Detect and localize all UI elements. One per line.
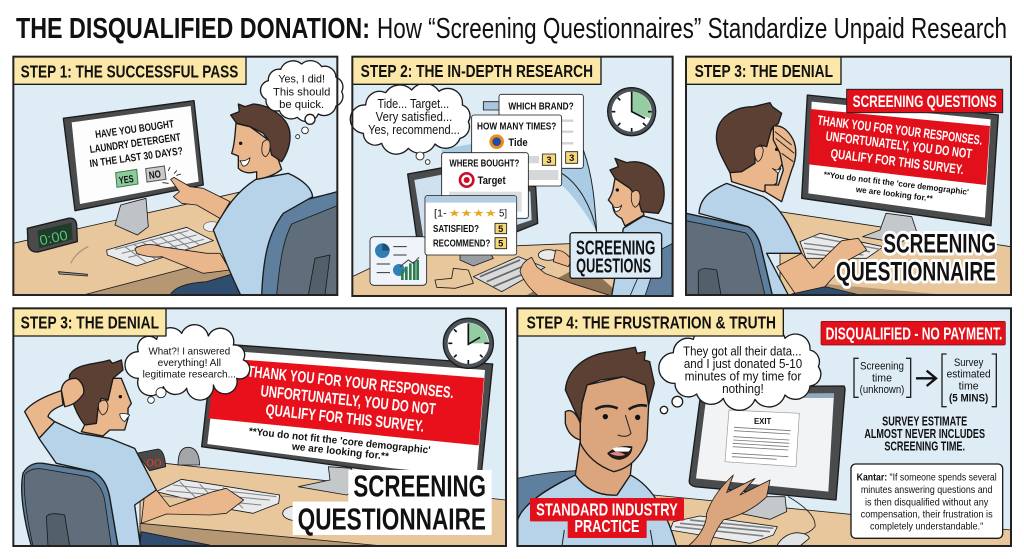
label: screening questions: QUESTIONS — [576, 254, 651, 277]
quote box: kantar: completely understandable." — [870, 522, 984, 533]
flow: screening time to survey estimate: Screening — [860, 361, 904, 373]
denial message — [246, 364, 454, 463]
document: exit: EXIT — [754, 416, 771, 426]
step label: STEP 1: THE SUCCESSFUL PASS — [21, 61, 238, 81]
monitor — [689, 386, 845, 500]
person and props — [22, 360, 280, 546]
card: how many times: Tide — [508, 137, 528, 149]
keyboard — [156, 479, 280, 513]
flow: screening time to survey estimate — [854, 354, 996, 407]
step label — [352, 57, 601, 84]
raised arm — [25, 391, 63, 438]
monitor — [408, 167, 538, 266]
screen question: LAUNDRY DETERGENT — [89, 131, 182, 156]
label: screening questions — [570, 233, 662, 278]
mousepad shape — [435, 268, 473, 288]
chair — [518, 471, 575, 520]
quote box: kantar: is then disqualified without any — [865, 497, 989, 508]
card: rating — [425, 196, 517, 255]
quote box: kantar — [851, 464, 1003, 538]
icon: tide logo — [489, 134, 504, 149]
icon: digital clock — [27, 218, 77, 252]
quote box: kantar: compensation, their frustration is — [861, 509, 993, 520]
card: which brand: WHICH BRAND? — [508, 101, 574, 112]
flow: screening time to survey estimate: Survey — [954, 357, 984, 369]
icon: digital clock and speaker: :00 — [142, 458, 162, 470]
step label — [517, 308, 783, 336]
step label — [13, 57, 246, 84]
panel: step 2 the in-depth research — [350, 57, 673, 296]
panel: step 3 the denial — [686, 57, 1011, 295]
monitor — [802, 95, 998, 226]
note: survey estimate: SCREENING TIME. — [884, 439, 965, 453]
thought bubble: What?! I answered — [148, 346, 230, 357]
thought bubble: and I just donated 5-10 — [684, 356, 802, 371]
person — [135, 104, 313, 295]
card: rating: SATISFIED? — [433, 224, 479, 235]
card: how many times — [472, 115, 562, 186]
head — [608, 158, 664, 226]
thought bubble: Yes, I did! — [278, 74, 325, 86]
denial message — [817, 113, 983, 203]
button no: NO — [148, 169, 162, 182]
keyboard — [800, 233, 883, 258]
label: screening questions: SCREENING — [576, 236, 655, 259]
thought bubble: Tide... Target... — [377, 97, 449, 111]
screen question: HAVE YOU BOUGHT — [94, 118, 175, 141]
denial message: UNFORTUNATELY, YOU DO NOT — [260, 383, 437, 419]
arrow — [916, 371, 936, 386]
note: survey estimate — [864, 414, 985, 453]
monitor — [202, 343, 493, 487]
denial message: THANK YOU FOR YOUR RESPONSES. — [246, 364, 454, 402]
monitor stand — [740, 497, 787, 519]
thought bubble: Yes, recommend... — [368, 123, 460, 137]
chair — [22, 463, 118, 546]
panel: step 3 the denial wide — [13, 308, 506, 546]
flow: screening time to survey estimate: (unknown) — [860, 384, 905, 396]
icon: pen — [58, 272, 87, 276]
denial message: **You do not fit the 'core demographic' — [248, 426, 431, 457]
denial message: we are looking for.** — [854, 184, 934, 203]
card: where bought: WHERE BOUGHT? — [449, 159, 519, 170]
button yes: YES — [118, 174, 134, 187]
label: screening questionnaire — [293, 470, 492, 536]
denial message: QUALIFY FOR THIS SURVEY. — [830, 146, 965, 177]
monitor stand — [115, 198, 148, 235]
quote box: kantar: minutes answering questions and — [861, 485, 993, 496]
icon: digital clock: 0:00 — [38, 227, 69, 248]
card: rating: [1- — [434, 209, 447, 220]
step label: STEP 3: THE DENIAL — [21, 313, 159, 333]
label: screening questionnaire — [836, 228, 996, 287]
head — [81, 378, 131, 436]
quote box: kantar: Kantar: "If someone spends several — [857, 473, 997, 484]
thought bubble: be quick. — [279, 99, 324, 111]
thought bubble — [125, 325, 250, 403]
denial message: we are looking for.** — [290, 442, 390, 463]
thought bubble: nothing! — [722, 381, 764, 396]
keyboard — [107, 227, 213, 266]
thought bubble: They got all their data... — [683, 343, 801, 358]
document: exit — [725, 410, 799, 467]
person and chair — [686, 103, 867, 295]
red label: standard industry practice — [531, 499, 683, 537]
denial message: **You do not fit the 'core demographic' — [823, 169, 969, 197]
step label: STEP 2: THE IN-DEPTH RESEARCH — [361, 61, 593, 81]
keyboard — [473, 257, 545, 292]
card: which brand — [483, 94, 583, 168]
panel: step 4 the frustration and truth — [517, 308, 1011, 546]
thought bubble — [261, 61, 343, 139]
trousers — [140, 532, 210, 546]
step label: STEP 3: THE DENIAL — [695, 61, 833, 81]
chart card — [370, 237, 427, 285]
red label: standard industry practice: PRACTICE — [574, 516, 639, 536]
flow: screening time to survey estimate: time — [872, 372, 892, 384]
swoosh — [442, 140, 597, 232]
person — [518, 347, 676, 546]
note: survey estimate: SURVEY ESTIMATE — [882, 414, 967, 428]
chair — [258, 192, 337, 295]
keyboard — [670, 516, 777, 543]
card: rating: 5] — [499, 209, 507, 220]
chair — [686, 213, 772, 295]
card: rating: 5 — [498, 224, 503, 234]
head — [231, 104, 290, 179]
flow: screening time to survey estimate: estimated — [947, 369, 991, 381]
denial message: QUALIFY FOR THIS SURVEY. — [265, 402, 425, 436]
person — [520, 158, 673, 296]
step label: STEP 4: THE FRUSTRATION & TRUTH — [527, 313, 776, 333]
thought bubble — [350, 84, 470, 164]
monitor stand — [863, 213, 917, 243]
step label — [686, 57, 841, 84]
card: where bought — [442, 153, 528, 218]
icon: digital clock and speaker — [136, 447, 200, 471]
card: rating: RECOMMEND? — [433, 239, 490, 250]
flow: screening time to survey estimate: time — [959, 380, 979, 392]
red label: standard industry practice: STANDARD INDUSTRY — [536, 499, 678, 519]
monitor — [63, 101, 203, 211]
card: rating: 5 — [498, 239, 503, 249]
thought bubble — [659, 322, 821, 414]
mouse — [777, 533, 809, 546]
shirt — [39, 422, 156, 546]
label: screening questionnaire: SCREENING — [353, 470, 486, 504]
icon: wall clock — [443, 318, 493, 368]
thought bubble: legitimate research... — [143, 369, 236, 380]
panel: step 1 the successful pass — [13, 57, 343, 295]
thought bubble: Very satisfied... — [376, 110, 452, 124]
forearm — [141, 488, 244, 523]
card: where bought: Target — [478, 175, 506, 187]
step label — [13, 308, 166, 336]
card: how many times: HOW MANY TIMES? — [477, 121, 556, 132]
label: screening questionnaire: QUESTIONNAIRE — [298, 502, 486, 536]
screen question: IN THE LAST 30 DAYS? — [89, 145, 184, 170]
thought bubble: minutes of my time for — [685, 368, 802, 383]
card: how many times: 3 — [546, 155, 552, 165]
screen question — [89, 118, 184, 170]
flow: screening time to survey estimate: (5 MINS) — [949, 392, 989, 404]
gesturing hand — [688, 475, 770, 546]
card: which brand: 3 — [569, 153, 574, 163]
card: rating: ★★★★ — [448, 209, 497, 220]
thought bubble: everything! All — [158, 358, 221, 369]
icon: wall clock — [608, 88, 656, 136]
title — [16, 13, 1007, 45]
thought bubble: This should — [273, 86, 330, 98]
icon: target logo — [459, 172, 475, 188]
title: THE DISQUALIFIED DONATION: — [16, 13, 370, 45]
